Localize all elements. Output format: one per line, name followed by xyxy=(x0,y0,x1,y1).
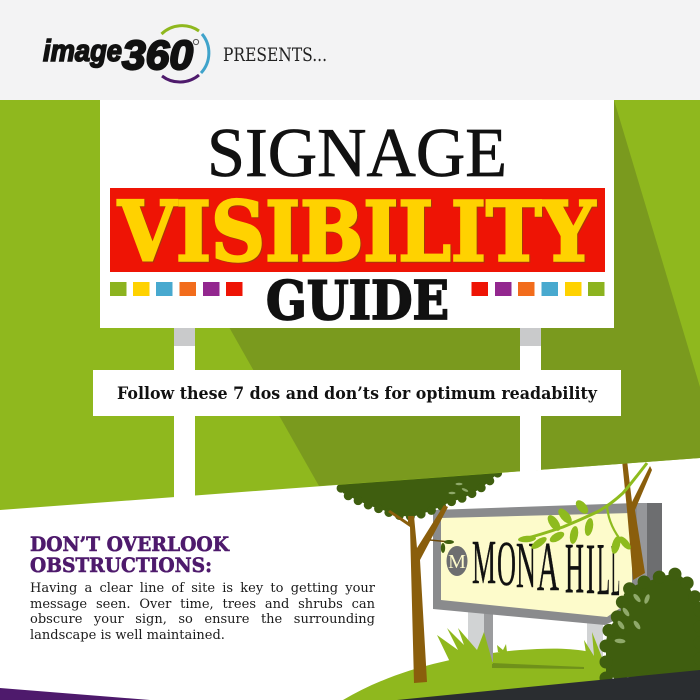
title: signage: SIGNAGE xyxy=(207,115,507,192)
title: visibility: VISIBILITY xyxy=(117,184,596,280)
roadside sign xyxy=(433,503,662,669)
sign lettering: O xyxy=(497,528,516,599)
body text: Having a clear line of site is key to getting your xyxy=(30,581,375,596)
sign lettering: A xyxy=(537,529,559,606)
right tree xyxy=(622,460,652,580)
canopy leaves xyxy=(448,483,469,494)
billboard poles xyxy=(174,327,541,498)
body text xyxy=(30,581,375,642)
logo: image360 xyxy=(43,26,209,82)
sign logo circle xyxy=(446,546,468,576)
road xyxy=(397,670,700,700)
logo: image360: 360 xyxy=(122,32,193,78)
red banner xyxy=(110,188,605,272)
body text: landscape is well maintained. xyxy=(30,628,225,642)
title: visibility: VISIBILITY xyxy=(118,186,597,282)
shrub leaves xyxy=(614,593,651,644)
body text: obscure your sign, so ensure the surrounding xyxy=(30,612,375,627)
sign frame xyxy=(433,503,637,625)
grass tufts xyxy=(437,628,604,680)
header band xyxy=(0,0,700,100)
sign cream panel xyxy=(441,513,632,617)
colour squares left xyxy=(110,282,242,296)
sign lettering: L xyxy=(597,529,610,611)
dark green shadow xyxy=(225,100,700,486)
presents label: PRESENTS... xyxy=(223,45,327,66)
subtitle band xyxy=(93,370,621,416)
roadside sign: L xyxy=(611,530,620,612)
sign side faces xyxy=(637,503,662,600)
body text: message seen. Over time, trees and shrubs can xyxy=(30,596,375,612)
colour squares right xyxy=(472,282,604,296)
green billboard backdrop xyxy=(0,100,700,510)
title: guide: GUIDE xyxy=(266,270,449,332)
canopy xyxy=(337,468,502,516)
sign lettering: N xyxy=(516,529,536,602)
post shadow xyxy=(492,663,584,669)
purple footer wedge xyxy=(0,688,150,700)
sign logo circle: M xyxy=(448,551,466,573)
title board xyxy=(100,100,614,332)
subtitle band: Follow these 7 dos and don’ts for optimum readability xyxy=(117,384,598,404)
section heading: DON’T OVERLOOK xyxy=(30,532,230,556)
section heading: OBSTRUCTIONS: xyxy=(30,553,212,577)
small branch with leaves xyxy=(430,540,454,553)
sign lettering: M xyxy=(472,529,496,597)
hill xyxy=(343,649,612,700)
sign posts xyxy=(468,610,603,662)
section heading xyxy=(30,532,230,577)
sign lettering: H xyxy=(565,528,584,608)
left tree xyxy=(337,468,502,683)
shrub xyxy=(606,574,700,678)
vine xyxy=(518,463,647,555)
sign lettering: I xyxy=(586,529,595,609)
logo: image360: image xyxy=(43,33,122,68)
trunk and branches xyxy=(388,505,448,683)
sign lettering xyxy=(472,528,620,612)
